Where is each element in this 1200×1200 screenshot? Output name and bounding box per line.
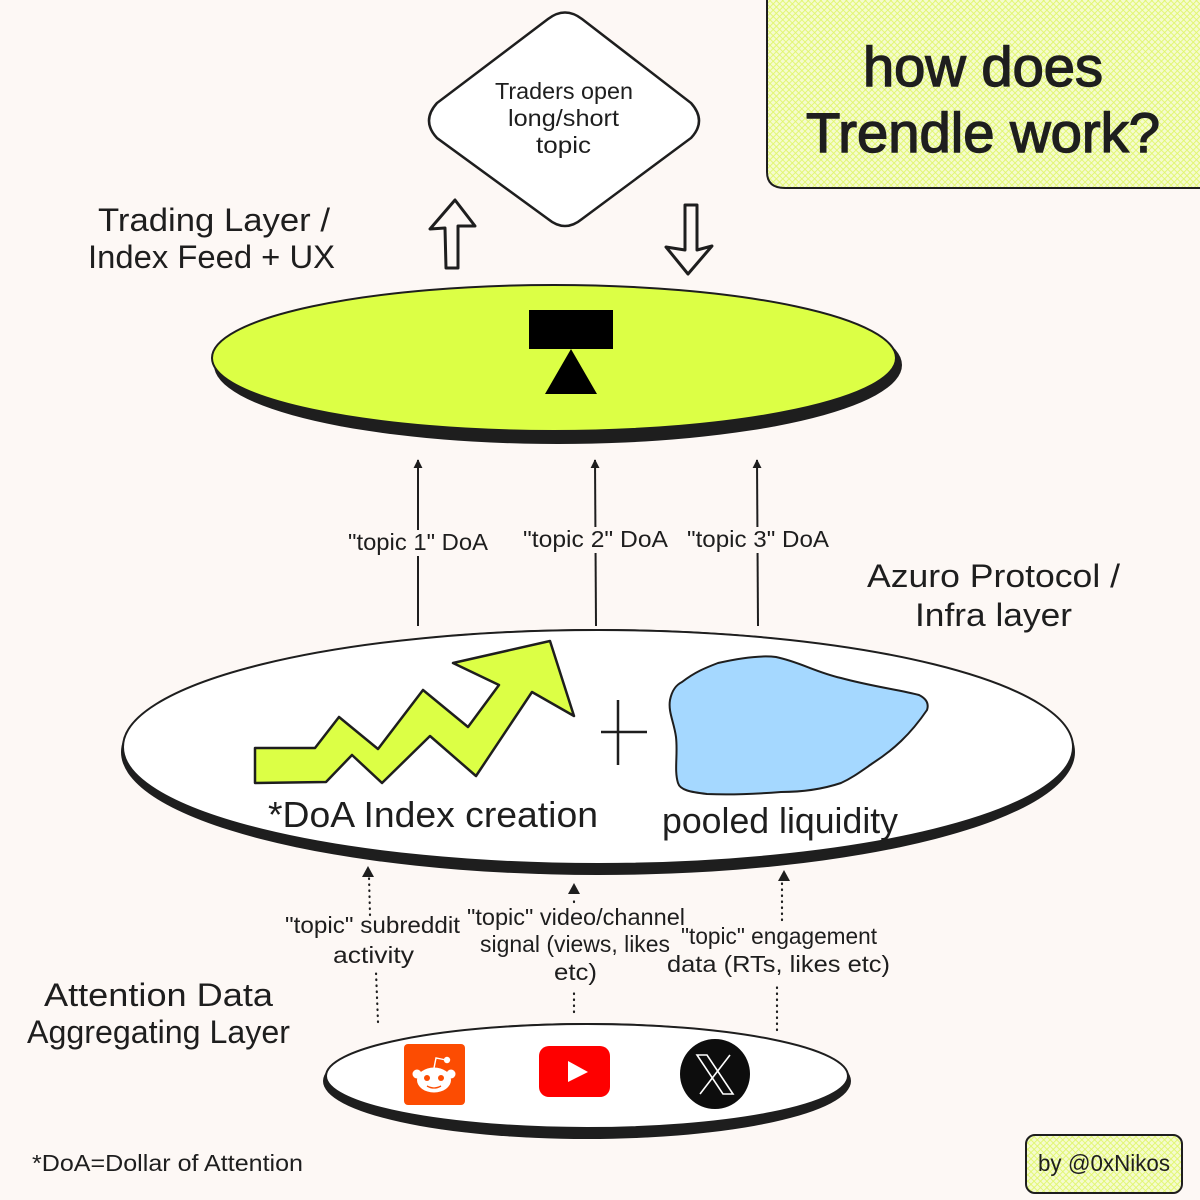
decision diamond: traders open long/short topic: Traders open: [495, 78, 633, 104]
icon: reddit: [404, 1044, 465, 1105]
dotted arrow: reddit signal: [285, 866, 461, 1022]
label: trading layer: Trading Layer /: [98, 202, 330, 238]
dotted arrow: x signal: "topic" engagement: [681, 923, 878, 949]
dotted arrow: youtube signal: etc): [554, 959, 597, 985]
credit box: [1026, 1135, 1182, 1193]
arrow: topic 1: "topic 1" DoA: [348, 529, 489, 555]
title text: how does: [863, 35, 1103, 98]
icon: zigzag trend arrow: [255, 641, 574, 783]
label: pooled liquidity: pooled liquidity: [662, 800, 898, 841]
arrow: topic 3: [685, 460, 831, 626]
arrow: topic 2: "topic 2" DoA: [523, 526, 669, 552]
dotted arrow: x signal: [667, 870, 890, 1030]
title panel: [767, 0, 1200, 188]
dotted arrow: youtube signal: "topic" video/channel: [467, 904, 685, 930]
label: trading layer: [88, 202, 335, 275]
title text: [806, 35, 1160, 164]
infra layer ellipse: [121, 629, 1075, 875]
label: attention data layer: Aggregating Layer: [27, 1014, 290, 1050]
decision diamond: traders open long/short topic: long/short: [508, 105, 620, 131]
label: azuro protocol: [867, 558, 1120, 633]
arrow: topic 3: "topic 3" DoA: [687, 526, 830, 552]
footnote: DoA definition: *DoA=Dollar of Attention: [32, 1150, 303, 1176]
dotted arrow: reddit signal: activity: [333, 942, 415, 968]
label: attention data layer: Attention Data: [44, 977, 273, 1013]
label: azuro protocol: Infra layer: [915, 597, 1072, 633]
credit box: by @0xNikos: [1038, 1150, 1170, 1176]
decision diamond: traders open long/short topic: topic: [536, 132, 591, 158]
arrow: topic 1: [346, 460, 490, 626]
icon: plus: [601, 700, 647, 765]
label: DoA index creation: *DoA Index creation: [268, 794, 598, 835]
dotted arrow: reddit signal: "topic" subreddit: [285, 912, 461, 938]
title text: Trendle work?: [806, 101, 1160, 164]
icon: liquidity pool blob: [670, 656, 928, 794]
icon: hollow down arrow: [666, 205, 712, 274]
icon: youtube: [539, 1046, 610, 1097]
dotted arrow: x signal: data (RTs, likes etc): [667, 951, 890, 977]
arrow: topic 2: [521, 460, 670, 626]
dotted arrow: youtube signal: [467, 883, 685, 1012]
icon: trendle logo: [529, 310, 613, 394]
decision diamond: traders open long/short topic: [429, 12, 699, 226]
label: trading layer: Index Feed + UX: [88, 239, 335, 275]
attention data ellipse: [323, 1023, 851, 1139]
trading layer ellipse: [212, 285, 902, 444]
label: attention data layer: [27, 977, 290, 1050]
label: azuro protocol: Azuro Protocol /: [867, 558, 1120, 594]
icon: hollow up arrow: [430, 200, 475, 268]
icon: x logo: [680, 1039, 750, 1109]
dotted arrow: youtube signal: signal (views, likes: [480, 931, 670, 957]
